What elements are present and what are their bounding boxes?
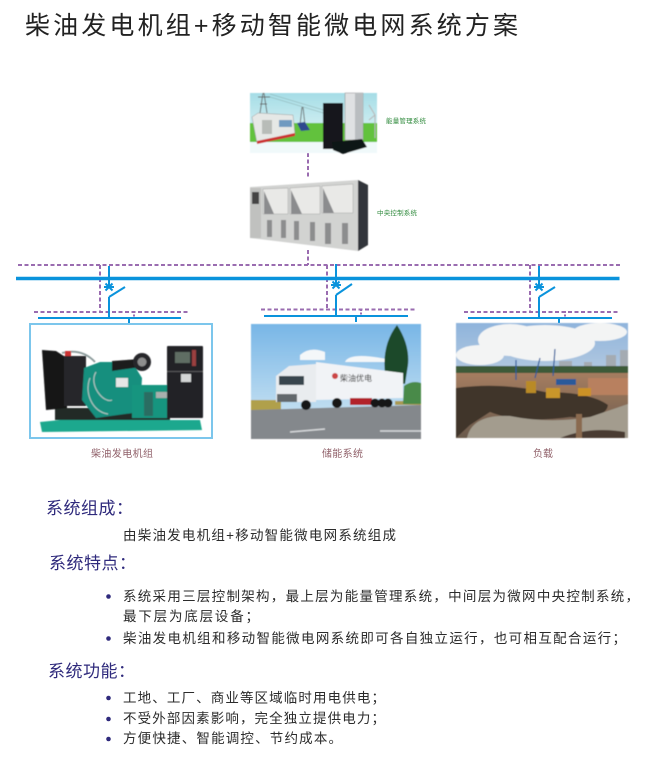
switch branch: load xyxy=(468,266,612,323)
label: central control: 中央控制系统 xyxy=(377,208,418,217)
section: system features xyxy=(49,554,639,647)
communication dashed lines xyxy=(18,153,620,317)
heading: 系统特点： xyxy=(49,554,136,573)
bullet list: 柴油发电机组和移动智能微电网系统即可各自独立运行，也可相互配合运行； xyxy=(123,631,626,647)
network diagram xyxy=(16,153,620,323)
switch branch: storage xyxy=(264,264,408,322)
image: energy management system xyxy=(250,93,377,154)
bullet list xyxy=(106,589,639,647)
heading: 系统组成： xyxy=(46,499,133,518)
title: 柴油发电机组+移动智能微电网系统方案 xyxy=(25,12,518,40)
caption: generator: 柴油发电机组 xyxy=(91,447,153,460)
image: central control system xyxy=(250,180,368,251)
panel: diesel generator xyxy=(30,324,212,438)
text: 由柴油发电机组+移动智能微电网系统组成 xyxy=(123,528,396,543)
bullet list: 不受外部因素影响，完全独立提供电力； xyxy=(123,710,385,727)
image: generator xyxy=(40,346,203,432)
frame xyxy=(30,324,212,438)
section: system composition xyxy=(46,499,396,543)
bullet list: 系统采用三层控制架构，最上层为能量管理系统，中间层为微网中央控制系统， xyxy=(123,589,639,604)
panel: energy storage truck xyxy=(251,324,421,439)
caption: storage: 储能系统 xyxy=(322,447,363,460)
section: system functions xyxy=(48,662,385,746)
bullet list: 工地、工厂、商业等区域临时用电供电； xyxy=(123,690,385,706)
switch branch: generator xyxy=(38,266,181,323)
caption: load: 负载 xyxy=(533,447,553,460)
bullet list: 最下层为底层设备； xyxy=(123,608,259,625)
label: energy management: 能量管理系统 xyxy=(386,116,426,125)
bullet list: 方便快捷、智能调控、节约成本。 xyxy=(123,731,342,746)
panel: energy storage truck: 柴油优电 xyxy=(340,373,372,383)
heading: 系统功能： xyxy=(48,662,135,681)
main power bus xyxy=(16,277,620,280)
bullet list xyxy=(106,690,385,746)
panel: load construction site xyxy=(456,323,628,438)
